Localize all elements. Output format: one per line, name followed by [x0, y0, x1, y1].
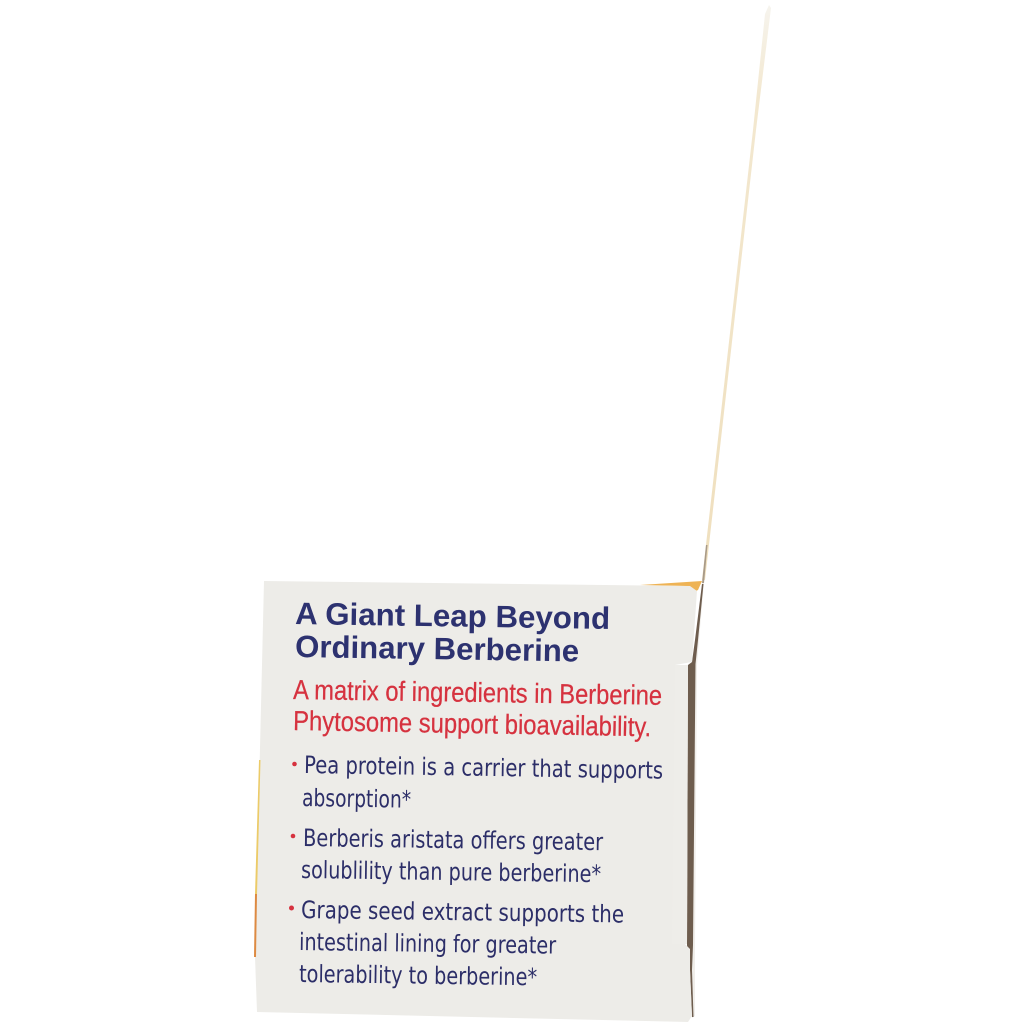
red subheading: A matrix of ingredients in Berberine [293, 674, 662, 711]
bullet: berberis aristata: solublility than pure berberine* [301, 856, 601, 888]
open box flap seen edge-on [702, 5, 771, 583]
red subheading: Phytosome support bioavailability. [293, 705, 651, 742]
orange strip at top of box [640, 581, 702, 593]
box side edge [687, 583, 704, 1018]
red subheading [293, 674, 662, 742]
heading: A Giant Leap Beyond [295, 596, 610, 636]
text block: panel copy [289, 596, 663, 991]
bullet: pea protein: absorption* [302, 784, 411, 814]
bullet: grape seed extract [289, 896, 624, 991]
bullet: grape seed extract: tolerability to berberine* [299, 960, 537, 991]
bullet: grape seed extract: intestinal lining for greater [299, 928, 556, 960]
inner flap between tabs [672, 665, 688, 944]
heading: Ordinary Berberine [295, 629, 579, 668]
heading [295, 596, 610, 668]
bullet: berberis aristata [291, 824, 603, 888]
bullet: pea protein: Pea protein is a carrier that supports [304, 751, 663, 785]
yellow and orange edge on left side of box [254, 760, 260, 957]
bullet: grape seed extract: Grape seed extract supports the [301, 896, 624, 929]
bullet: pea protein [292, 751, 663, 814]
panel: white box face [255, 581, 697, 1022]
bullet: berberis aristata: Berberis aristata offers greater [303, 824, 603, 856]
